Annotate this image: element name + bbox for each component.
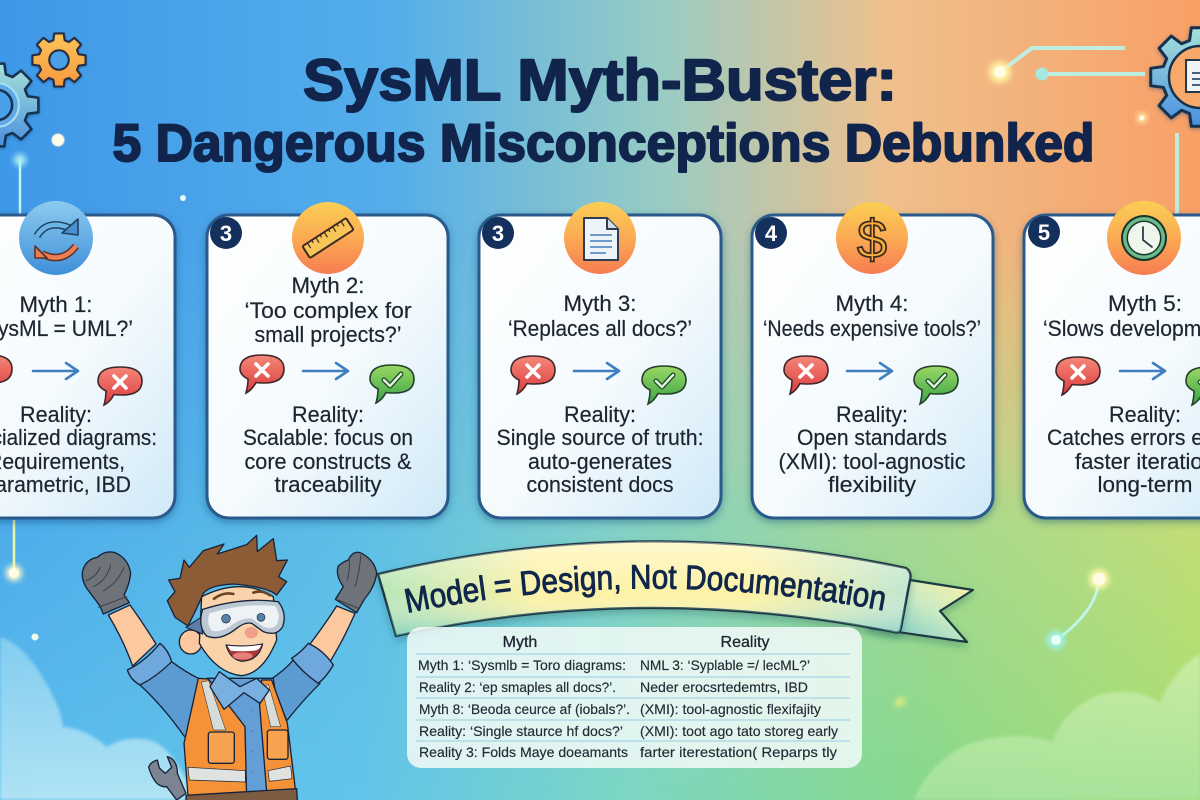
number badge [755,217,787,249]
icon: clock [1107,201,1181,275]
face [199,587,277,676]
table header: Reality [721,634,769,651]
table row 5: farter iterestation( Reparps tly [640,744,837,760]
panel: myth 1 card [0,201,175,518]
shirt [193,678,290,800]
table row 2: Neder erocsrtedemtrs, IBD [640,679,808,695]
panel: myth 4 card [752,202,993,518]
myth statement [508,291,692,341]
icon: ruler [292,202,364,274]
reality statement [0,402,157,497]
myth statement: ‘Replaces all docs?’ [508,316,692,341]
number badge: 5 [1038,220,1050,245]
table row 1 [418,657,810,673]
reality statement: consistent docs [526,472,674,497]
myth statement: Myth 1: [20,292,92,317]
reality statement [496,402,704,497]
right sleeve and arm [271,606,355,721]
number badge [210,217,242,249]
myth statement: Myth 3: [564,291,636,316]
left sleeve and arm [108,605,198,745]
verdict icons and arrow [1056,357,1200,405]
table row 2: Reality 2: ‘ep smaples all docs?’. [419,679,616,695]
reality statement: core constructs & [244,449,412,474]
table row 4 [419,723,838,739]
reality statement: Reality: [564,402,636,427]
myth statement: ‘Needs expensive tools?’ [763,316,981,341]
reality statement [243,402,413,497]
eyebrows [214,591,270,599]
table row 4: (XMI): toot ago tato storeg early [640,723,838,739]
table row 2 [419,679,808,695]
reality statement: Reality: [20,402,92,427]
cloud: bottom right [913,653,1200,800]
reality statement: Reality: [292,402,364,427]
table row 1: NML 3: ‘Syplable =/ lecML?’ [640,657,810,673]
icon: sync arrows [19,201,93,275]
panel: myth 5 card [1024,201,1200,518]
number badge [1028,216,1060,248]
ribbon tail [868,580,973,642]
reality statement: (XMI): tool-agnostic [778,449,966,474]
wrench [149,757,186,800]
reality statement: Reality: [1109,402,1181,427]
panel: myth 2 card [207,202,448,518]
safety vest [184,678,297,800]
table header [503,634,769,651]
table header: Myth [503,634,537,651]
number badge [482,217,514,249]
nose [245,627,258,638]
title line 1: SysML Myth-Buster: [303,48,897,113]
reality statement: long-term [1098,472,1192,497]
myth statement: small projects?’ [254,322,402,347]
reality statement: Open standards [797,425,947,450]
table row 3: (XMI): tool-agnostic flexifajity [640,701,821,717]
belt [186,789,297,800]
verdict icons and arrow [511,356,686,404]
reality statement [778,402,966,497]
character: cheering engineer [82,535,377,800]
banner ribbon [375,540,975,650]
number badge: 4 [765,221,778,246]
number badge: 3 [492,221,504,246]
reality statement [1047,402,1200,497]
verdict icons and arrow [240,355,414,403]
reality statement: traceability [274,472,382,497]
reality statement: flexibility [828,472,916,497]
table row 4: Reality: ‘Single staurce hf docs?’ [419,723,623,739]
myth statement: ‘Too complex for [244,298,412,323]
icon: dollar sign [836,202,908,274]
icon: small orange gear, top left [32,33,86,87]
right glove [335,552,377,613]
ribbon body [378,541,910,636]
verdict icons and arrow [0,355,142,405]
collar [210,672,269,709]
icon: dollar sign: $ [857,210,887,270]
table row 1: Myth 1: ‘Sysmlb = Toro diagrams: [418,657,626,673]
panel: myth vs reality table [407,627,862,768]
table row 3: Myth 8: ‘Beoda ceurce af (iobals?’. [419,701,630,717]
title [112,48,1094,173]
table row 5: Reality 3: Folds Maye doeamants [419,744,628,760]
myth statement [0,292,133,341]
number badge: 3 [220,221,232,246]
myth statement: Myth 2: [292,273,364,298]
ear [179,630,202,654]
icon: document gear, top right [1151,28,1200,126]
reality statement: auto-generates [528,449,672,474]
left glove [82,552,131,614]
goggles [186,600,284,638]
myth statement: Myth 5: [1108,291,1182,316]
cloud: bottom left [0,637,195,800]
icon: large blue gear, top left [0,64,38,146]
myth statement: Myth 4: [836,291,908,316]
table row 3 [419,701,821,717]
title line 2: 5 Dangerous Misconceptions Debunked [112,114,1094,173]
banner text: Model = Design, Not Documentation [404,564,885,613]
icon: document [564,202,636,274]
myth statement [763,291,981,341]
panel: myth 3 card [479,202,721,518]
verdict icons and arrow [784,356,958,404]
myth statement [1043,291,1200,341]
hair [167,535,287,626]
table row 5 [419,744,837,760]
reality statement: Reality: [836,402,908,427]
mouth [226,644,263,661]
reality statement: Scalable: focus on [243,425,413,450]
reality statement: Single source of truth: [496,425,704,450]
myth statement [244,273,412,347]
